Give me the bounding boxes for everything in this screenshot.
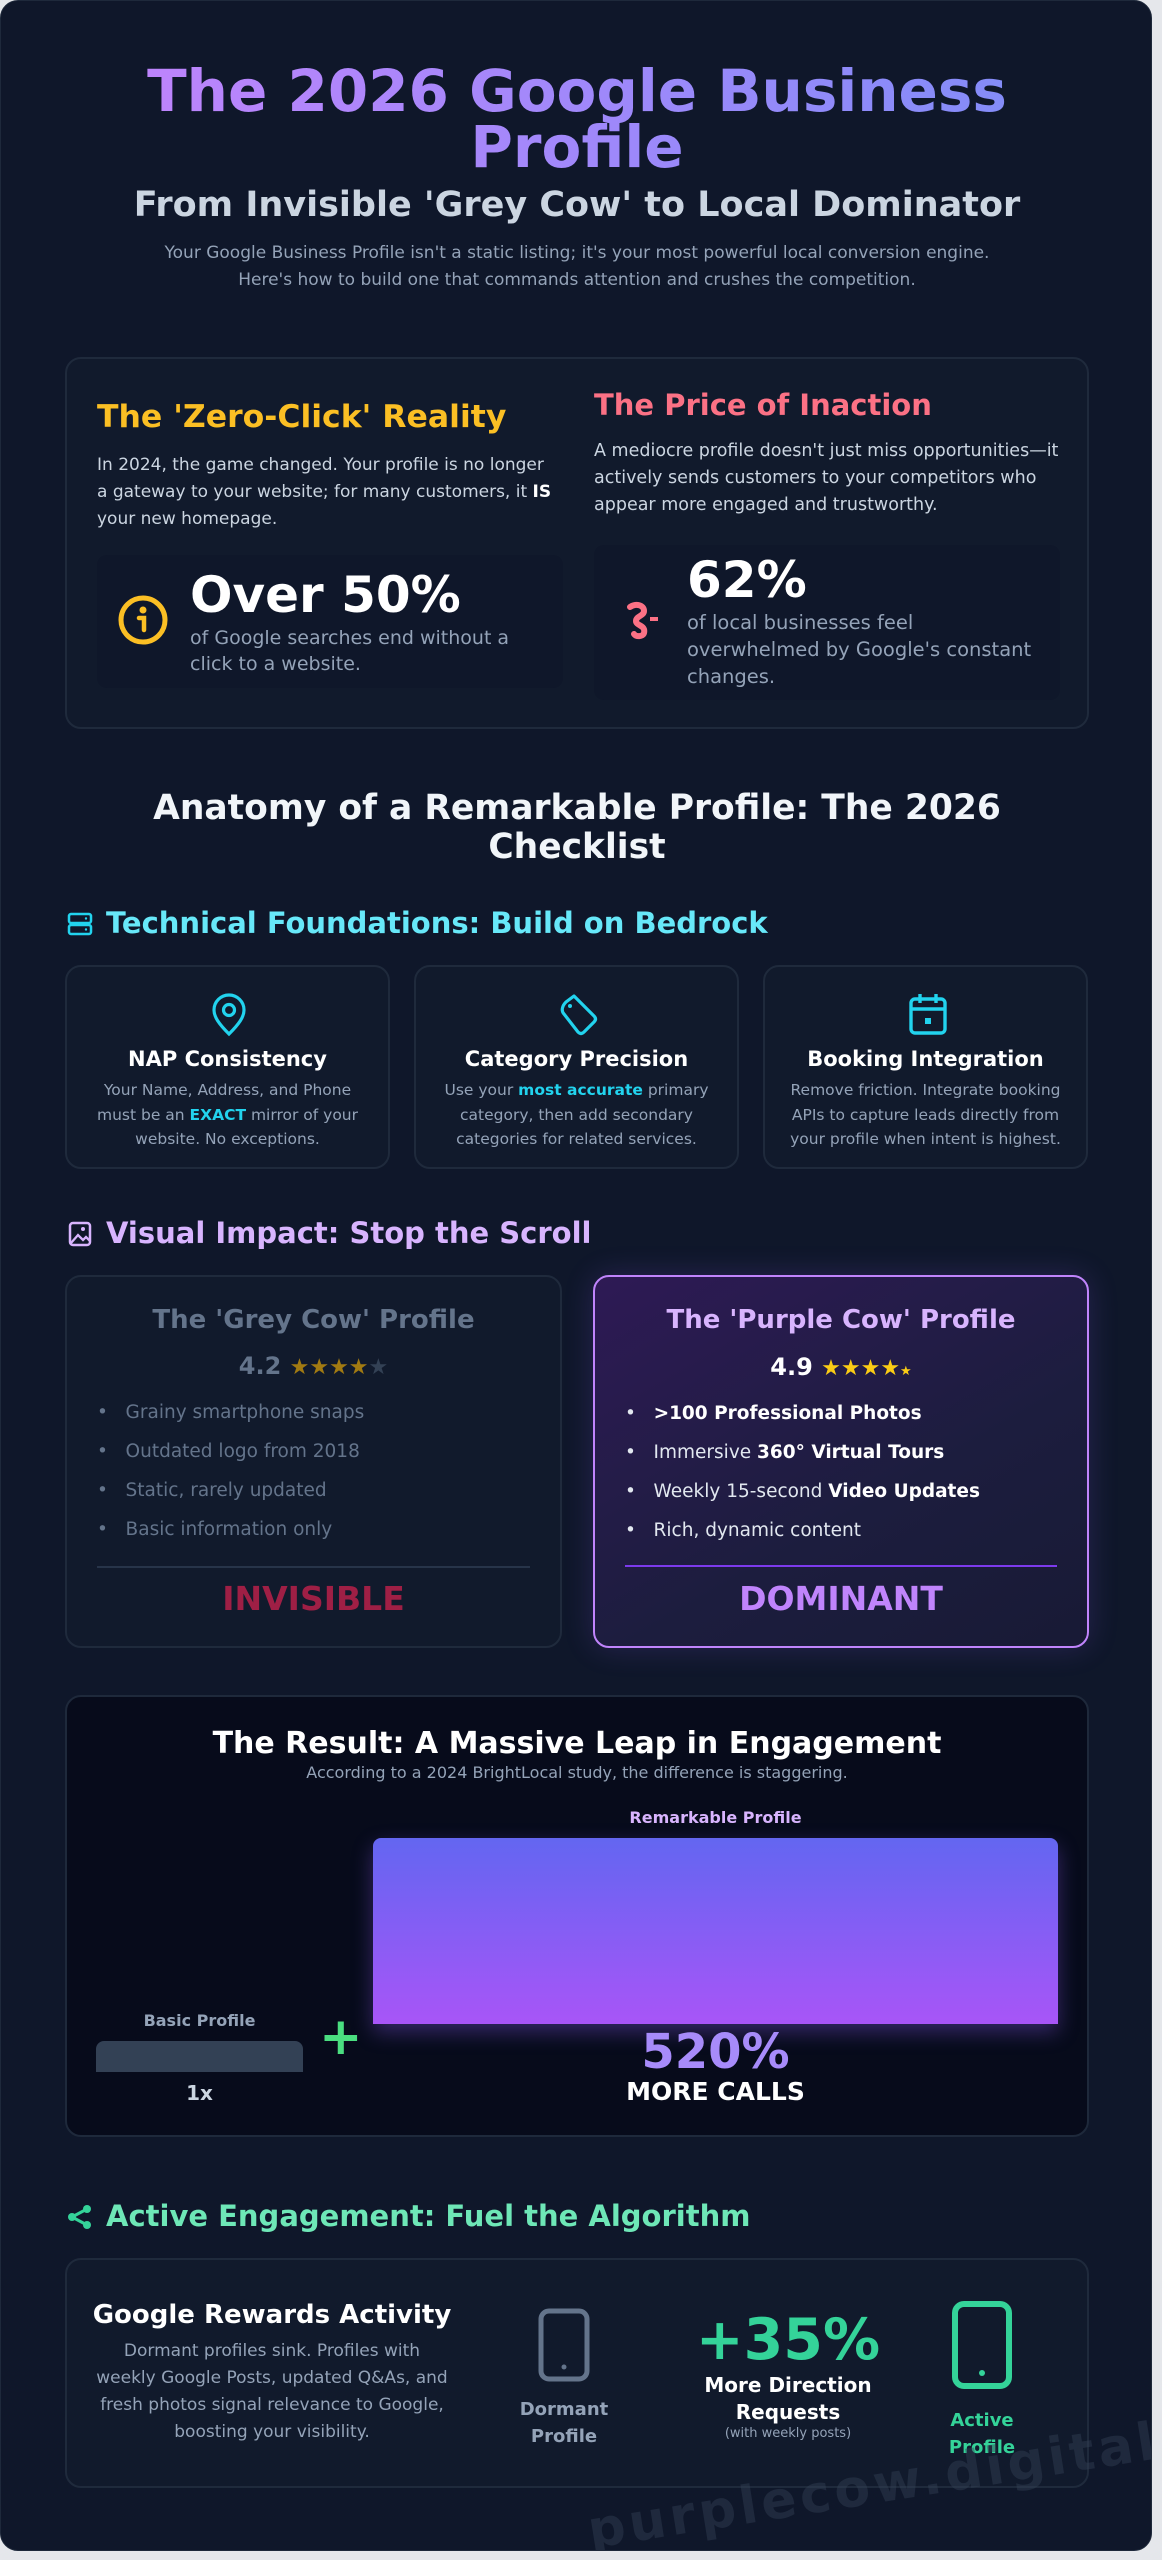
stat: 520% [626, 2024, 805, 2106]
panel: result chart: 1x [186, 2081, 213, 2105]
rating: 4.9 ★★★★★ [770, 1353, 912, 1381]
heading: price of inaction: The Price of Inaction [594, 388, 932, 422]
bullet list: • Grainy smartphone snaps [97, 1402, 364, 1423]
heading: active engagement: Active Engagement: Fuel the Algorithm [106, 2199, 750, 2233]
text: google rewards: fresh photos signal relevance to Google, [100, 2395, 444, 2415]
panel: zero-click and inaction [65, 357, 1089, 729]
icon: active phone: Profile [949, 2437, 1015, 2458]
text: google rewards: weekly Google Posts, updated Q&As, and [96, 2368, 448, 2388]
panel: active engagement [65, 2258, 1089, 2488]
card: NAP consistency [65, 965, 390, 1169]
icon: share [68, 2205, 91, 2229]
intro text: Here's how to build one that commands attention and crushes the competition. [238, 270, 916, 290]
card: purple cow: The 'Purple Cow' Profile [666, 1305, 1016, 1335]
panel: result chart: The Result: A Massive Leap in Engagement [213, 1726, 941, 1761]
card: NAP consistency: NAP Consistency [128, 1047, 327, 1071]
stat: 520%: 520% [641, 2024, 790, 2080]
text: google rewards: boosting your visibility. [174, 2422, 370, 2442]
bullet list: • >100 Professional Photos [625, 1403, 922, 1424]
bullet list: • Outdated logo from 2018 [97, 1441, 360, 1462]
text: price of inaction: A mediocre profile doesn't just miss opportunities—it actively sends customers to your competitors who appear more engaged and trustworthy. [594, 441, 1058, 515]
intro text [164, 243, 989, 290]
bullet list: • Rich, dynamic content [625, 1520, 861, 1541]
bullet list [625, 1403, 980, 1541]
section heading: anatomy: Anatomy of a Remarkable Profile: The 2026 Checklist [153, 788, 1001, 867]
card: grey cow [65, 1275, 562, 1648]
icon: active phone [949, 2301, 1015, 2458]
bullet list: • Static, rarely updated [97, 1480, 327, 1501]
card: booking integration: Booking Integration [807, 1047, 1044, 1071]
stat: +35% [696, 2307, 880, 2441]
heading: visual impact: Visual Impact: Stop the Scroll [106, 1216, 591, 1250]
intro text: Your Google Business Profile isn't a static listing; it's your most powerful local conversion engine. [165, 243, 989, 263]
bullet list: • Immersive 360° Virtual Tours [625, 1442, 944, 1463]
heading: zero-click: The 'Zero-Click' Reality [97, 399, 506, 435]
card: purple cow [593, 1275, 1089, 1648]
stat: 520%: MORE CALLS [626, 2077, 805, 2106]
rating: 4.2 ★★★★★ [239, 1352, 388, 1380]
label: invisible: INVISIBLE [222, 1579, 405, 1618]
label: basic profile: Basic Profile [144, 2011, 255, 2030]
text: zero-click: In 2024, the game changed. Your profile is no longer a gateway to your website; for many customers, it IS your new homepage. [97, 455, 551, 529]
icon: map pin [212, 993, 246, 1036]
icon: tag [560, 994, 598, 1036]
bar: basic [96, 2041, 303, 2072]
panel: result chart: According to a 2024 BrightLocal study, the difference is staggering. [306, 1763, 848, 1782]
stat text [687, 551, 1031, 688]
title: The 2026 Google Business Profile [147, 57, 1007, 181]
stat: +35%: (with weekly posts) [725, 2426, 851, 2441]
card: booking integration [763, 965, 1088, 1169]
heading: technical foundations: Technical Foundations: Build on Bedrock [106, 906, 768, 940]
icon: dormant phone: Profile [531, 2426, 597, 2447]
text: google rewards: Dormant profiles sink. Profiles with [124, 2341, 420, 2361]
card: grey cow: The 'Grey Cow' Profile [152, 1305, 475, 1335]
icon: image [68, 1222, 92, 1246]
stat box: over 50% [97, 555, 563, 688]
card: category precision: Category Precision [465, 1047, 688, 1071]
icon: info [118, 596, 168, 644]
stat text: of Google searches end without a click to a website. [190, 627, 509, 675]
bullet list: • Weekly 15-second Video Updates [625, 1481, 980, 1502]
bullet list [97, 1402, 364, 1540]
stat text: of local businesses feel overwhelmed by Google's constant changes. [687, 611, 1031, 688]
card: category precision: Use your most accurate primary category, then add secondary categories for related services. [444, 1081, 708, 1148]
stat text: 62% [687, 551, 807, 609]
text: google rewards [93, 2300, 451, 2442]
label: remarkable profile: Remarkable Profile [629, 1808, 802, 1827]
icon: active phone: Active [950, 2410, 1014, 2431]
stat text [190, 566, 509, 675]
stat: +35%: More Direction [704, 2373, 872, 2397]
card: NAP consistency: Your Name, Address, and Phone must be an EXACT mirror of your website. No exceptions. [97, 1081, 358, 1148]
icon: plus: + [319, 2007, 363, 2067]
icon: overwhelmed [627, 602, 658, 640]
icon: dormant phone: Dormant [520, 2399, 608, 2420]
icon: calendar [909, 994, 947, 1035]
stat: +35%: Requests [736, 2400, 840, 2424]
subtitle: From Invisible 'Grey Cow' to Local Dominator [134, 185, 1020, 225]
card: booking integration: Remove friction. Integrate booking APIs to capture leads directly from your profile when intent is highest. [790, 1081, 1061, 1148]
bar: remarkable [373, 1838, 1058, 2024]
label: dominant: DOMINANT [739, 1579, 943, 1618]
icon: dormant phone [520, 2308, 608, 2447]
stat text: Over 50% [190, 566, 461, 624]
text: google rewards: Google Rewards Activity [93, 2300, 451, 2330]
icon: server [68, 912, 92, 936]
panel: result chart [65, 1695, 1089, 2137]
stat: +35%: +35% [696, 2307, 880, 2373]
bullet list: • Basic information only [97, 1519, 332, 1540]
stat box: 62% [594, 545, 1060, 700]
card: category precision [414, 965, 739, 1169]
